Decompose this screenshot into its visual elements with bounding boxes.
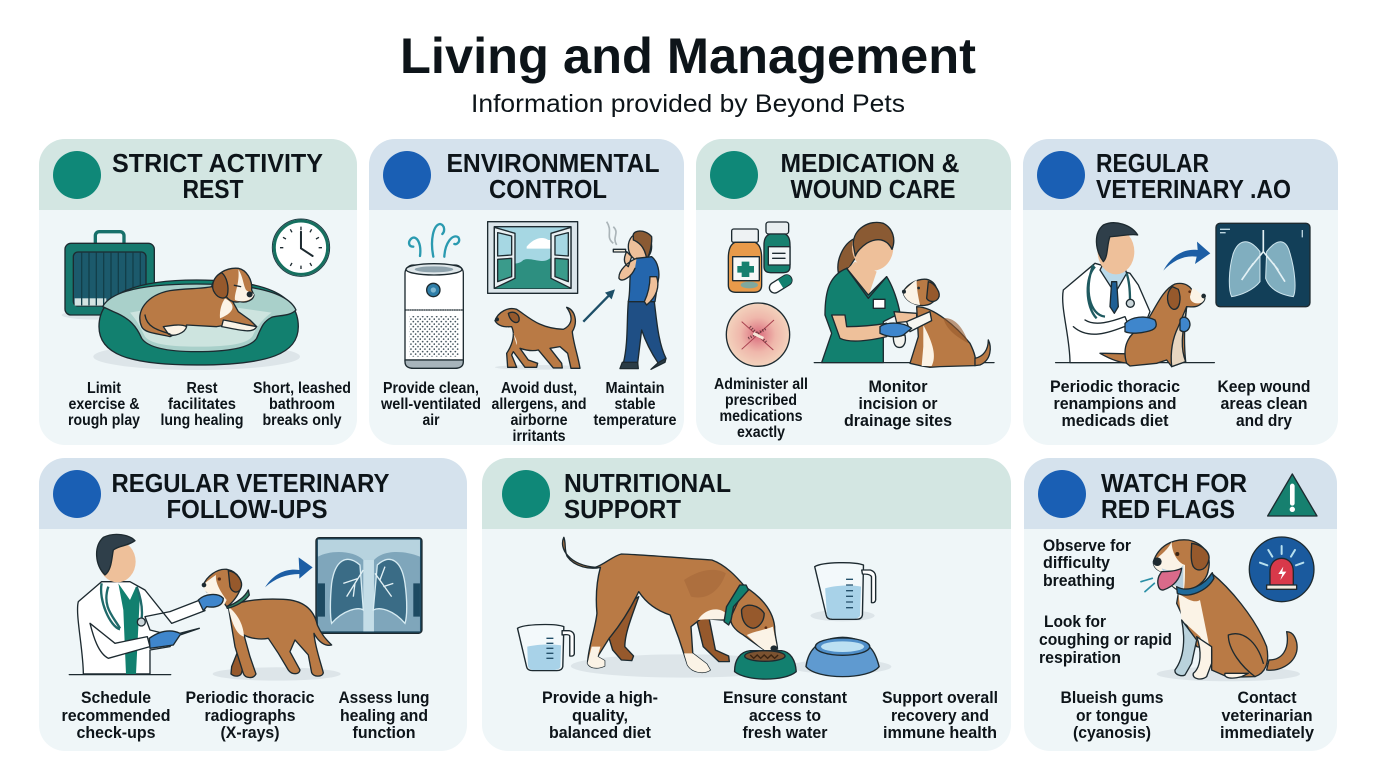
panel: regular veterinary (garbled)	[1023, 139, 1338, 445]
label: contact veterinarian	[1220, 689, 1315, 742]
illustration: dog on bed with crate and clock	[62, 219, 330, 370]
heading: REGULAR	[1096, 148, 1209, 178]
label: short breaks: breaks only	[262, 412, 342, 429]
label: clean air: air	[422, 412, 440, 429]
label: balanced diet: Provide a high-	[542, 689, 658, 707]
label: blueish gums: or tongue	[1076, 707, 1148, 725]
label: coughing or rapid respiration: respiration	[1039, 649, 1121, 667]
label: administer medications: exactly	[737, 424, 785, 441]
title: Living and Management	[400, 28, 976, 84]
label: administer medications: medications	[720, 408, 802, 425]
heading	[564, 468, 731, 524]
label: assess lung healing	[338, 689, 430, 742]
panel: watch for red flags	[1024, 458, 1337, 751]
heading: NUTRITIONAL	[564, 468, 731, 498]
label: periodic radiographs: radiographs	[204, 707, 296, 725]
heading: CONTROL	[489, 174, 607, 204]
label: difficulty breathing: difficulty	[1043, 554, 1111, 572]
icon: warning triangle	[1268, 474, 1317, 516]
label: keep wound clean: and dry	[1236, 412, 1293, 430]
illustration: vet examining dog with x-ray	[69, 534, 422, 681]
label: periodic thoracic: renampions and	[1054, 395, 1176, 413]
label: periodic radiographs: Periodic thoracic	[186, 689, 314, 707]
label: rest facilitates: facilitates	[168, 396, 236, 413]
heading: RED FLAGS	[1101, 494, 1235, 524]
label: avoid irritants: allergens, and	[492, 396, 586, 413]
label: schedule check-ups: Schedule	[81, 689, 151, 707]
label: avoid irritants	[492, 380, 586, 445]
panel: nutritional support	[482, 458, 1011, 751]
label: administer medications	[714, 376, 808, 441]
label: blueish gums: (cyanosis)	[1073, 724, 1151, 742]
label: rest facilitates: lung healing	[160, 412, 244, 429]
label: short breaks: Short, leashed	[253, 380, 351, 397]
panel: environmental control	[369, 139, 684, 445]
heading: REGULAR VETERINARY	[112, 468, 390, 498]
label: balanced diet: balanced diet	[549, 724, 651, 742]
label: balanced diet	[542, 689, 658, 742]
label: periodic thoracic	[1050, 378, 1180, 430]
label: coughing or rapid respiration: coughing or rapid	[1039, 631, 1172, 649]
label: difficulty breathing: Observe for	[1043, 537, 1132, 555]
heading: WOUND CARE	[790, 174, 956, 204]
label: clean air: Provide clean,	[383, 380, 479, 397]
heading	[112, 468, 390, 524]
label: limit exercise	[68, 380, 140, 429]
label: recovery support: Support overall	[882, 689, 998, 707]
label: periodic thoracic: Periodic thoracic	[1050, 378, 1180, 396]
label: avoid irritants: irritants	[512, 428, 566, 445]
label: administer medications: Administer all	[714, 376, 808, 393]
label: stable temperature	[594, 380, 677, 429]
heading: FOLLOW-UPS	[166, 494, 328, 524]
label: blueish gums: Blueish gums	[1060, 689, 1164, 707]
label: clean air: well-ventilated	[380, 396, 481, 413]
label: limit exercise: rough play	[68, 412, 140, 429]
label: clean air	[380, 380, 481, 429]
label: stable temperature: temperature	[594, 412, 677, 429]
heading: STRICT ACTIVITY	[112, 148, 323, 178]
label: contact veterinarian: immediately	[1220, 724, 1315, 742]
heading	[1096, 148, 1291, 204]
label: administer medications: prescribed	[725, 392, 797, 409]
label: monitor incision: drainage sites	[844, 412, 952, 430]
label: avoid irritants: Avoid dust,	[501, 380, 577, 397]
label: keep wound clean	[1218, 378, 1310, 430]
heading: VETERINARY .AO	[1096, 174, 1291, 204]
label: coughing or rapid respiration	[1039, 613, 1172, 667]
label: short breaks	[253, 380, 351, 429]
label: limit exercise: exercise &	[68, 396, 140, 413]
heading: ENVIRONMENTAL	[446, 148, 660, 178]
heading	[780, 148, 960, 204]
illustration: purifier, window, dog and smoker	[405, 222, 666, 370]
label: monitor incision: Monitor	[868, 378, 928, 396]
label: schedule check-ups: check-ups	[76, 724, 156, 742]
heading: MEDICATION &	[780, 148, 960, 178]
label: limit exercise: Limit	[87, 380, 121, 397]
illustration: dog eating, cups and bowls	[518, 537, 891, 679]
subtitle: Information provided by Beyond Pets	[471, 90, 905, 118]
label: recovery support: immune health	[883, 724, 997, 742]
label: periodic radiographs	[186, 689, 314, 742]
label: recovery support	[882, 689, 998, 742]
panel: medication and wound care	[696, 139, 1011, 445]
label: assess lung healing: Assess lung	[338, 689, 430, 707]
label: blueish gums	[1060, 689, 1164, 742]
panel: regular veterinary follow-ups	[39, 458, 467, 751]
label: difficulty breathing	[1043, 537, 1132, 590]
label: fresh water: access to	[749, 707, 821, 725]
label: recovery support: recovery and	[891, 707, 989, 725]
label: periodic radiographs: (X-rays)	[220, 724, 280, 742]
heading: SUPPORT	[564, 494, 681, 524]
heading	[112, 148, 323, 204]
label: stable temperature: Maintain	[606, 380, 664, 397]
label: keep wound clean: Keep wound	[1218, 378, 1310, 396]
label: short breaks: bathroom	[269, 396, 335, 413]
label: schedule check-ups	[62, 689, 170, 742]
label: contact veterinarian: Contact	[1238, 689, 1297, 707]
heading: REST	[182, 174, 244, 204]
label: monitor incision: incision or	[858, 395, 938, 413]
label: avoid irritants: airborne	[510, 412, 568, 429]
label: schedule check-ups: recommended	[62, 707, 170, 725]
heading	[446, 148, 660, 204]
label: coughing or rapid respiration: Look for	[1044, 613, 1107, 631]
label: periodic thoracic: medicads diet	[1062, 412, 1169, 430]
label: difficulty breathing: breathing	[1043, 572, 1115, 590]
label: contact veterinarian: veterinarian	[1222, 707, 1312, 725]
label: assess lung healing: function	[352, 724, 416, 742]
illustration: vet with dog and lung scan	[1056, 223, 1310, 367]
panel: strict activity rest	[39, 139, 357, 445]
heading: WATCH FOR	[1101, 468, 1247, 498]
label: rest facilitates: Rest	[186, 380, 218, 397]
illustration: medicine, wound and nurse with dog	[726, 222, 994, 367]
heading	[1101, 468, 1247, 524]
label: rest facilitates	[160, 380, 244, 429]
label: balanced diet: quality,	[572, 707, 628, 725]
label: stable temperature: stable	[614, 396, 656, 413]
illustration: panting dog and siren	[1141, 537, 1314, 681]
label: assess lung healing: healing and	[340, 707, 428, 725]
label: keep wound clean: areas clean	[1220, 395, 1308, 413]
label: fresh water: Ensure constant	[723, 689, 847, 707]
label: fresh water	[723, 689, 847, 742]
label: fresh water: fresh water	[742, 724, 828, 742]
label: monitor incision	[844, 378, 952, 430]
